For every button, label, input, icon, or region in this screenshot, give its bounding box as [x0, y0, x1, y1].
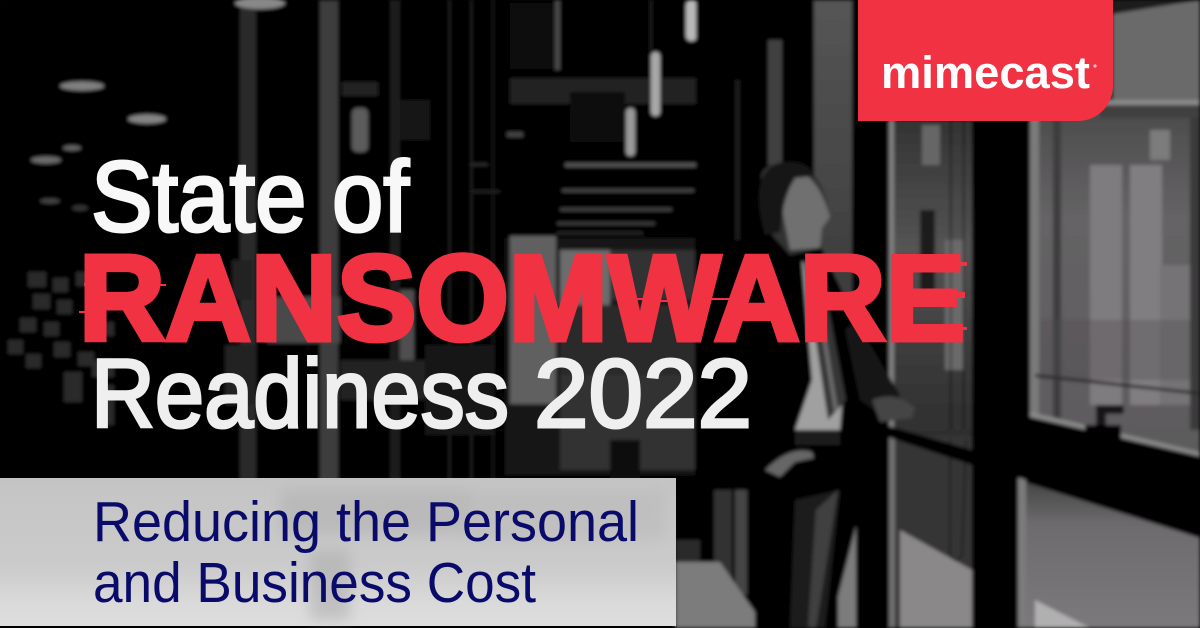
- logo: mimecast badge: [858, 0, 1113, 121]
- subtitle text: and Business Cost: [93, 551, 536, 615]
- central ceiling and shelving: [470, 0, 697, 234]
- subtitle text: Reducing the Personal: [93, 490, 639, 554]
- man at window: [705, 162, 915, 628]
- title: Readiness 2022: [91, 339, 752, 448]
- title: Readiness 2022: Readiness: [91, 339, 509, 448]
- title: State of: State of: [91, 141, 409, 253]
- left office wall and ceiling lights: [31, 0, 494, 480]
- title: RANSOMWARE with glitch: RANSOMWARE: [79, 230, 965, 366]
- panel: subtitle band: [0, 478, 676, 626]
- window sill: [885, 417, 1200, 538]
- right corridor frames: [676, 0, 860, 628]
- subtitle text: [93, 490, 639, 615]
- sticky notes on glass wall: [8, 272, 114, 425]
- window panes: [858, 0, 1200, 628]
- lower corridor: [225, 236, 695, 478]
- title: Readiness 2022: 2022: [534, 339, 752, 448]
- logo: mimecast badge: mimecast: [881, 47, 1090, 98]
- head: [761, 162, 830, 255]
